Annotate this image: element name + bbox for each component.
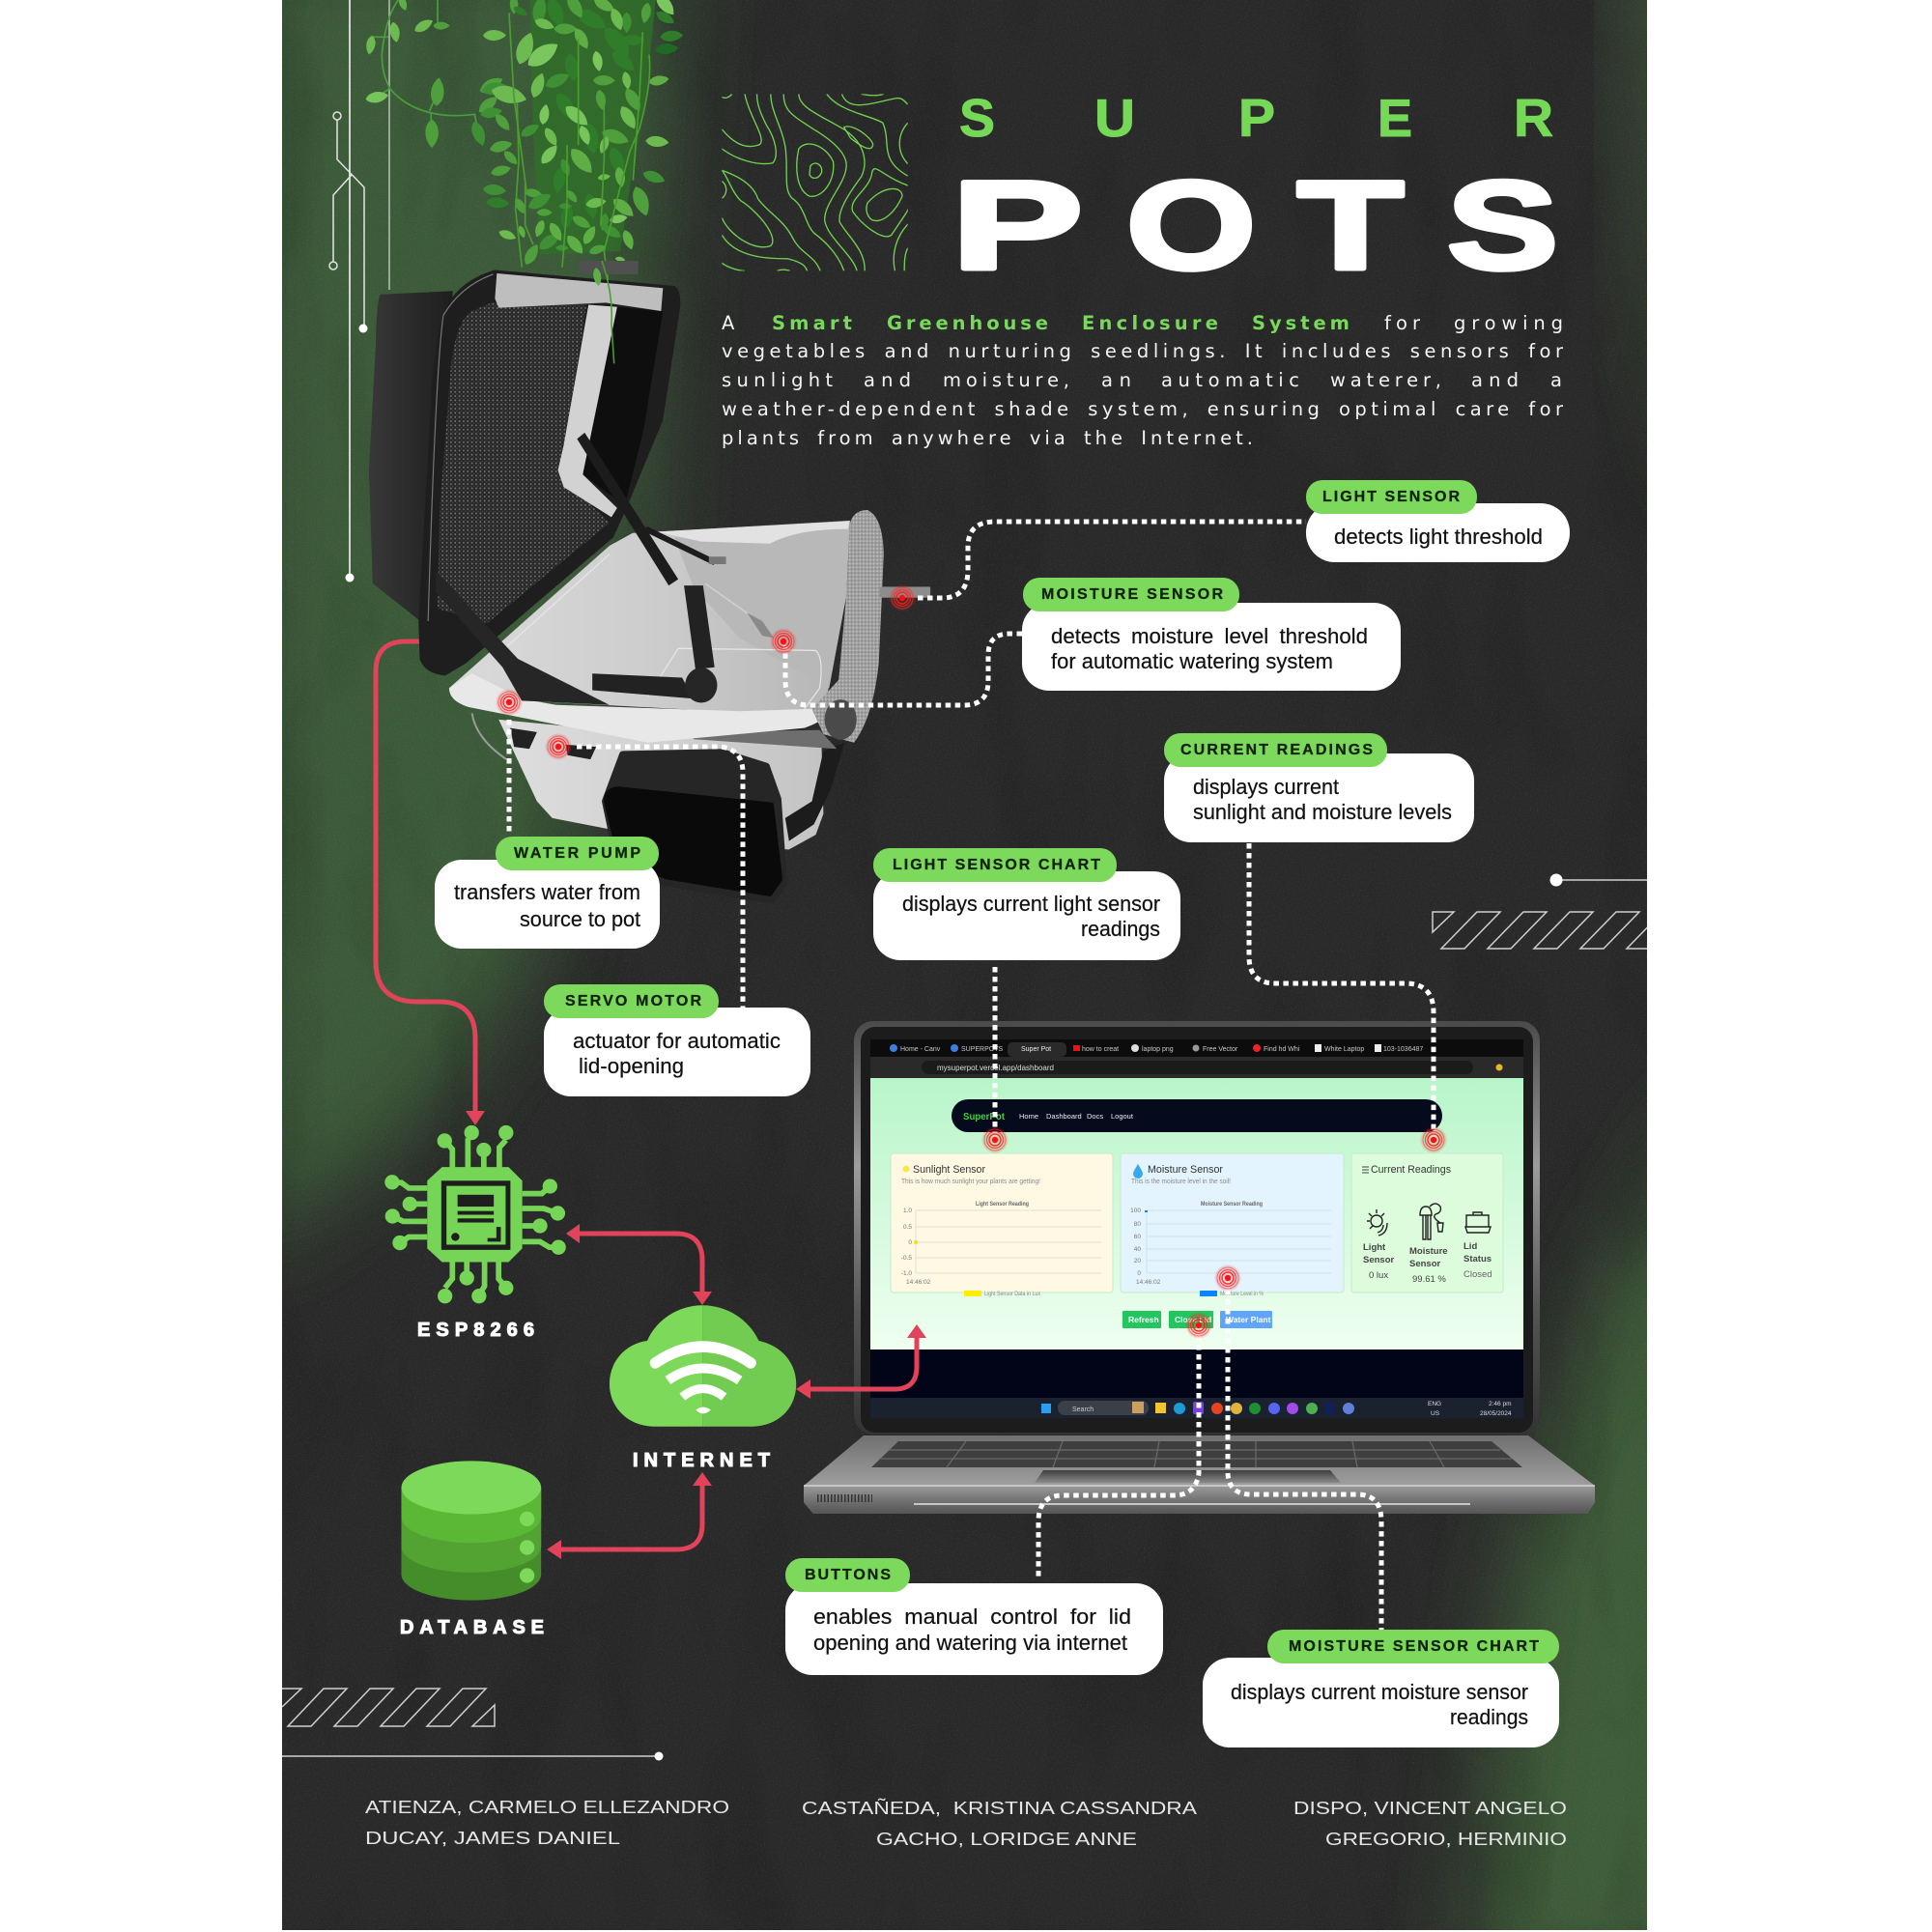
- plant: [364, 0, 684, 287]
- intro text: and: [864, 369, 911, 391]
- decoration: left hatch and line: [282, 1689, 663, 1760]
- intro text: automatic: [1161, 369, 1299, 391]
- laptop: navigation bar: Docs: [1087, 1112, 1103, 1121]
- label: ESP8266: ESP8266: [417, 1320, 534, 1341]
- intro text: waterer,: [1330, 369, 1441, 391]
- laptop: current readings card: 99.61 %: [1412, 1274, 1446, 1285]
- laptop: current readings card: [1351, 1153, 1503, 1293]
- arrow: pot to ESP8266: [376, 641, 485, 1125]
- callout: current readings: sunlight and moisture levels: [1193, 800, 1452, 824]
- team names: CASTAÑEDA, KRISTINA CASSANDRA: [802, 1798, 1197, 1818]
- pot: silver bars: [694, 730, 837, 749]
- callout: light sensor chart: [873, 848, 1180, 960]
- icon: internet cloud: [610, 1305, 796, 1427]
- laptop: browser chrome: laptop png: [1142, 1046, 1174, 1053]
- laptop: current readings card: Current Readings: [1371, 1164, 1451, 1176]
- laptop: taskbar: ENG: [1428, 1401, 1441, 1407]
- label: internet: INTERNET: [633, 1450, 770, 1471]
- laptop: moisture sensor card: 40: [1134, 1246, 1141, 1253]
- pot: rods and pipes: [436, 433, 774, 705]
- callout: current readings: CURRENT READINGS: [1180, 742, 1373, 758]
- title: S: [959, 88, 995, 148]
- intro text: [722, 312, 1564, 449]
- dotted connector: moisture sensor chart: [1228, 1280, 1381, 1630]
- pot: lid frame: [418, 270, 680, 675]
- laptop: navigation bar: Home: [1019, 1112, 1038, 1121]
- arrow: database to internet: [547, 1472, 712, 1559]
- laptop: navigation bar: Dashboard: [1046, 1112, 1082, 1121]
- laptop: browser chrome: [870, 1039, 1523, 1078]
- label: database: DATABASE: [400, 1617, 544, 1638]
- laptop: moisture sensor card: 14:46:02: [1136, 1279, 1161, 1286]
- laptop: [804, 1021, 1595, 1514]
- title: O: [1126, 155, 1256, 296]
- team names: DISPO, VINCENT ANGELO: [1293, 1799, 1567, 1818]
- title: P: [952, 155, 1083, 296]
- laptop: sunlight sensor card: -0.5: [901, 1255, 912, 1262]
- callout: moisture sensor: for automatic watering system: [1051, 649, 1333, 673]
- plant: stems: [509, 13, 650, 287]
- laptop: current readings card: Lid: [1463, 1241, 1477, 1252]
- laptop: current readings card: Light: [1363, 1242, 1386, 1253]
- laptop: moisture sensor card: This is the moisture level in the soil!: [1131, 1179, 1231, 1185]
- sensor markers on laptop: [981, 1126, 1447, 1339]
- laptop: browser chrome: 103-1036487: [1383, 1046, 1423, 1053]
- laptop: browser chrome: SUPERPOTS: [961, 1046, 1004, 1053]
- laptop: sunlight sensor card: 0: [908, 1239, 912, 1246]
- pot: foil strips: [495, 273, 663, 517]
- laptop: browser chrome: Super Pot: [1021, 1046, 1051, 1053]
- team names: ATIENZA, CARMELO ELLEZANDRO: [365, 1798, 729, 1817]
- callout: water pump: source to pot: [520, 907, 640, 931]
- laptop: taskbar: Search: [1072, 1406, 1094, 1413]
- arrow: ESP8266 to internet: [566, 1224, 712, 1305]
- team names: DUCAY, JAMES DANIEL: [365, 1829, 620, 1848]
- laptop: current readings card: Moisture: [1409, 1246, 1448, 1257]
- laptop: navigation bar: Logout: [1111, 1112, 1134, 1121]
- poster: [282, 0, 1647, 1930]
- team names: [365, 1798, 1567, 1849]
- callout: servo motor: SERVO MOTOR: [565, 993, 701, 1009]
- intro text: Greenhouse: [887, 312, 1048, 334]
- laptop: dashboard buttons: Water Plant: [1226, 1315, 1271, 1324]
- dotted connector: moisture sensor: [785, 634, 1022, 705]
- laptop: navigation bar: SuperPot: [963, 1112, 1006, 1122]
- callout: servo motor: [544, 984, 810, 1096]
- laptop: sunlight sensor card: 1.0: [903, 1208, 912, 1214]
- laptop: moisture sensor card: [1121, 1153, 1344, 1297]
- intro text: growing: [1454, 312, 1563, 334]
- laptop: moisture sensor card: 60: [1134, 1234, 1141, 1240]
- laptop: bezel: [854, 1021, 1540, 1435]
- callout: current readings: [1164, 733, 1474, 842]
- laptop: moisture sensor card: Moisture Level in %: [1220, 1292, 1264, 1297]
- laptop: sunlight sensor card: Light Sensor Data in Lux: [984, 1292, 1040, 1297]
- callout: water pump: WATER PUMP: [514, 845, 640, 862]
- plant: left tendril: [364, 0, 489, 148]
- laptop: taskbar: US: [1431, 1410, 1440, 1417]
- callout: light sensor chart: LIGHT SENSOR CHART: [893, 857, 1100, 873]
- laptop: browser chrome: Find hd Whi: [1264, 1046, 1300, 1053]
- pot: trailing stem: [592, 261, 614, 363]
- intro text: weather-dependent shade system, ensuring optimal care for: [722, 398, 1564, 420]
- laptop: moisture sensor card: Moisture Sensor Reading: [1201, 1201, 1263, 1208]
- callout: moisture sensor chart: MOISTURE SENSOR CHART: [1289, 1638, 1539, 1655]
- intro text: for: [1384, 312, 1421, 334]
- laptop: base: [804, 1435, 1595, 1514]
- laptop: dashboard buttons: Close Lid: [1175, 1315, 1211, 1324]
- intro text: and: [1471, 369, 1519, 391]
- laptop: browser chrome: how to creat: [1082, 1046, 1119, 1053]
- intro text: Enclosure: [1082, 312, 1218, 334]
- dotted connector: light sensor chart: [993, 967, 997, 1138]
- title: [952, 88, 1558, 296]
- callout: moisture sensor: MOISTURE SENSOR: [1041, 586, 1223, 603]
- callout: servo motor: actuator for automatic: [573, 1029, 781, 1053]
- callout: moisture sensor chart: displays current moisture sensor: [1231, 1680, 1528, 1704]
- decoration: right hatch and line: [1432, 873, 1647, 950]
- laptop: sunlight sensor card: Sunlight Sensor: [913, 1164, 985, 1176]
- callout: current readings: displays current: [1193, 775, 1339, 799]
- laptop: current readings card: Sensor: [1409, 1259, 1441, 1269]
- callout: water pump: [435, 837, 660, 949]
- laptop: navigation bar: [952, 1099, 1442, 1132]
- callout: buttons: BUTTONS: [805, 1567, 891, 1583]
- plant: dense foliage: [476, 0, 684, 267]
- sensor markers on pot: [497, 585, 916, 759]
- intro text: sunlight: [722, 369, 833, 391]
- callout: buttons: opening and watering via internet: [813, 1631, 1127, 1655]
- title: T: [1297, 155, 1404, 296]
- intro text: an: [1101, 369, 1131, 391]
- team names: GREGORIO, HERMINIO: [1325, 1830, 1567, 1849]
- pot: black battery box: [606, 753, 783, 899]
- laptop: sunlight sensor card: -1.0: [901, 1270, 912, 1277]
- laptop: dashboard buttons: Refresh: [1128, 1315, 1159, 1324]
- contour map decoration: [722, 94, 908, 270]
- title: E: [1378, 88, 1412, 148]
- laptop: sunlight sensor card: Light Sensor Reading: [976, 1201, 1029, 1208]
- callout: water pump: transfers water from: [454, 880, 640, 904]
- laptop: taskbar: 28/05/2024: [1480, 1410, 1512, 1417]
- callout: servo motor: lid-opening: [579, 1054, 684, 1078]
- pot: back panel: [369, 291, 453, 621]
- callout: light sensor: [1306, 480, 1570, 562]
- laptop: browser chrome: Free Vector: [1203, 1046, 1238, 1053]
- callout: light sensor chart: readings: [1081, 917, 1160, 941]
- laptop: moisture sensor card: 0: [1137, 1270, 1141, 1277]
- laptop: sunlight sensor card: 0.5: [903, 1224, 912, 1231]
- pot: shade mesh: [438, 302, 610, 623]
- intro text: a: [1550, 369, 1562, 391]
- icon: database: [401, 1461, 541, 1601]
- intro text: Smart: [772, 312, 852, 334]
- callout: buttons: [785, 1558, 1163, 1675]
- circuit lines decoration: [329, 0, 389, 582]
- callout: moisture sensor: [1022, 578, 1401, 691]
- callout: light sensor: LIGHT SENSOR: [1322, 489, 1460, 505]
- laptop: taskbar: [870, 1398, 1523, 1418]
- smart pot photo: [369, 261, 930, 899]
- laptop: current readings card: Closed: [1463, 1269, 1492, 1280]
- laptop: taskbar: 2:46 pm: [1489, 1401, 1511, 1407]
- laptop: dark desktop band: [870, 1350, 1523, 1398]
- title: P: [1238, 88, 1275, 148]
- callout: moisture sensor chart: readings: [1450, 1705, 1528, 1729]
- laptop: dashboard page: [870, 1078, 1523, 1350]
- laptop: current readings card: 0 lux: [1369, 1270, 1388, 1281]
- laptop: browser chrome: Home - Canv: [900, 1046, 941, 1053]
- laptop: moisture sensor card: Moisture Sensor: [1148, 1164, 1223, 1176]
- dotted connector: servo motor: [577, 747, 743, 1008]
- dotted connector: water pump: [506, 720, 512, 833]
- intro text: plants from anywhere via the Internet.: [722, 427, 1253, 449]
- pot: foam strip: [812, 510, 884, 743]
- laptop: sunlight sensor card: [891, 1153, 1113, 1297]
- pot: rim highlight: [428, 274, 493, 621]
- arrow: internet to laptop: [796, 1324, 926, 1399]
- laptop: current readings card: Status: [1463, 1254, 1492, 1264]
- callout: moisture sensor chart: [1203, 1630, 1559, 1747]
- dotted connector: light sensor: [918, 522, 1306, 598]
- laptop: browser chrome: mysuperpot.vercel.app/dashboard: [937, 1064, 1054, 1072]
- laptop: moisture sensor card: 100: [1130, 1208, 1141, 1214]
- icon: ESP8266 chip: [384, 1125, 566, 1303]
- callout: light sensor chart: displays current light sensor: [902, 892, 1160, 916]
- callout: light sensor: detects light threshold: [1334, 525, 1543, 549]
- pot: hardware modules: [472, 713, 596, 759]
- background: [242, 0, 1719, 1932]
- pot: hanger block: [579, 261, 639, 274]
- pot: lid inner dark panel: [582, 307, 663, 506]
- title: U: [1094, 88, 1135, 148]
- pot: tray bowl: [498, 720, 823, 849]
- laptop: moisture sensor card: 20: [1134, 1258, 1141, 1264]
- laptop: dashboard buttons: [1122, 1311, 1272, 1328]
- laptop: browser chrome: White Laptop: [1324, 1046, 1364, 1053]
- intro text: System: [1252, 312, 1350, 334]
- dotted connector: current readings: [1249, 843, 1434, 1138]
- intro text: A: [722, 312, 735, 334]
- intro text: moisture,: [943, 369, 1069, 391]
- laptop: sunlight sensor card: This is how much sunlight your plants are getting!: [901, 1179, 1040, 1185]
- title: S: [1447, 155, 1558, 296]
- title: R: [1514, 88, 1553, 148]
- laptop: sunlight sensor card: 14:46:02: [906, 1279, 931, 1286]
- laptop: current readings card: Sensor: [1363, 1255, 1395, 1265]
- team names: GACHO, LORIDGE ANNE: [876, 1830, 1137, 1849]
- intro text: vegetables and nurturing seedlings. It includes sensors for: [722, 340, 1564, 362]
- callout: buttons: enables manual control for lid: [813, 1605, 1131, 1629]
- pot: tray interior: [449, 521, 850, 743]
- pot: right support strap: [785, 743, 844, 841]
- pot: sensor stub: [880, 586, 930, 598]
- callout: moisture sensor: detects moisture level threshold: [1051, 624, 1368, 648]
- dotted connector: buttons: [1038, 1325, 1199, 1579]
- laptop: moisture sensor card: 80: [1134, 1221, 1141, 1228]
